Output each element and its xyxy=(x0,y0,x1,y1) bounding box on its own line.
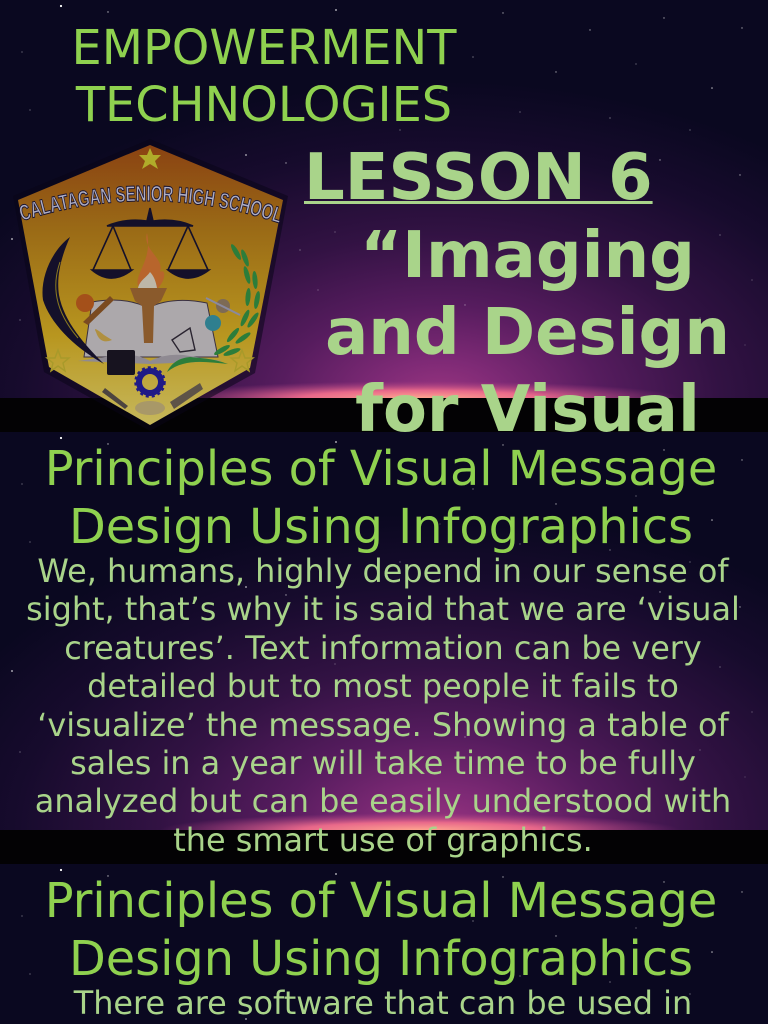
lesson title xyxy=(325,224,730,432)
lesson title: and Design xyxy=(325,296,730,370)
crest open book xyxy=(78,300,222,364)
section heading: principles (first) xyxy=(45,442,717,555)
body paragraph: the smart use of graphics. xyxy=(173,821,593,859)
body paragraph: creatures’. Text information can be very xyxy=(64,629,702,667)
slide 1 sky xyxy=(0,0,768,399)
body paragraph: ‘visualize’ the message. Showing a table of xyxy=(37,706,729,744)
crest quill xyxy=(42,237,104,364)
crest laurel xyxy=(167,243,261,372)
heading: empowerment technologies xyxy=(72,21,457,133)
body paragraph: detailed but to most people it fails to xyxy=(87,667,679,705)
crest tools xyxy=(102,383,203,415)
body paragraph: sales in a year will take time to be fully xyxy=(70,744,696,782)
slide 2 sky xyxy=(0,432,768,864)
crest scales xyxy=(92,208,209,278)
body paragraph: We, humans, highly depend in our sense of xyxy=(37,552,729,590)
heading: lesson number: LESSON 6 xyxy=(304,141,653,215)
school crest xyxy=(18,145,288,430)
section heading: principles (second): Principles of Visual Message xyxy=(45,874,717,929)
heading: empowerment technologies: TECHNOLOGIES xyxy=(76,78,452,133)
body paragraph: analyzed but can be easily understood with xyxy=(35,782,731,820)
crest small stars xyxy=(47,350,253,371)
section heading: principles (second) xyxy=(45,874,717,987)
crest shield shape xyxy=(13,139,288,431)
section heading: principles (second): Design Using Infographics xyxy=(69,932,693,987)
slide 3 sky xyxy=(0,864,768,1024)
section heading: principles (first): Principles of Visual Message xyxy=(45,442,717,497)
heading: empowerment technologies: EMPOWERMENT xyxy=(72,21,456,76)
crest school name: CALATAGAN SENIOR HIGH SCHOOL xyxy=(20,185,280,224)
body paragraph: sight, that’s why it is said that we are ‘visual xyxy=(26,590,740,628)
crest sports and science icons xyxy=(76,294,240,352)
body paragraph xyxy=(26,552,740,859)
crest gear emblem xyxy=(136,368,164,396)
crest torch xyxy=(130,233,167,343)
section heading: principles (first): Design Using Infographics xyxy=(69,500,693,555)
crest top star xyxy=(139,148,161,169)
crest ink bottle xyxy=(107,350,135,375)
